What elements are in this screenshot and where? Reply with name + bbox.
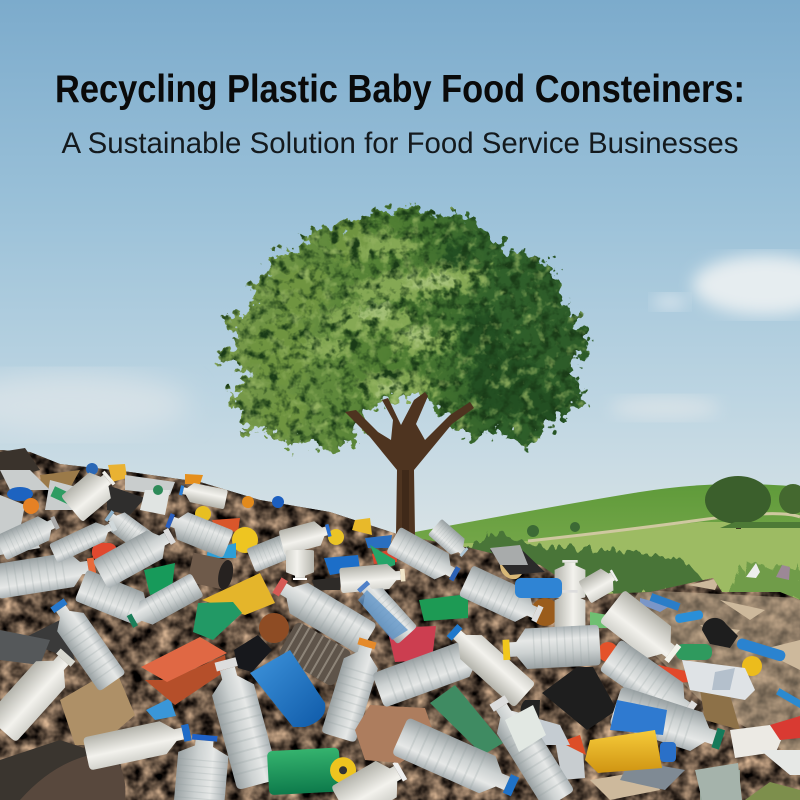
tree (215, 205, 593, 535)
tall grass by the pile (462, 532, 712, 600)
milky bottle (0, 549, 98, 599)
green wedge (193, 602, 242, 640)
blue tinted bottle (358, 590, 408, 640)
blue cap bottle (44, 594, 126, 692)
tube, wedges and boxes (141, 553, 617, 730)
white jug (0, 642, 83, 742)
white bottle with blue cap (83, 716, 193, 770)
front bottles (0, 515, 728, 800)
distant landscape: hills, road, trees (415, 476, 800, 640)
small scattered caps and scraps (0, 448, 800, 800)
copper bottle (355, 705, 436, 763)
yellow wedge (202, 573, 275, 615)
yellow jug (585, 730, 676, 773)
trunk and branches (345, 392, 474, 535)
dark container (234, 635, 272, 672)
people in field (746, 563, 790, 580)
green crate (419, 594, 468, 621)
blue cylinder bottle (515, 578, 562, 598)
orange lidded box (141, 637, 227, 705)
red cup (387, 626, 436, 662)
blue and clear bottle (609, 686, 728, 759)
plastic waste pile (0, 440, 800, 800)
brown tube (187, 553, 236, 591)
short bottle with blue cap (173, 733, 230, 800)
subtitle: A Sustainable Solution for Food Service Businesses (62, 127, 738, 160)
corrugated dark bottle (277, 621, 353, 687)
green ribbed bottle (430, 685, 503, 755)
tall clear bottle (204, 654, 279, 790)
green bottle with yellow cap (267, 747, 357, 795)
foliage (215, 205, 593, 455)
black funnel (542, 667, 617, 730)
small bushes (527, 522, 580, 537)
brown cap (259, 613, 289, 643)
far right tree (779, 484, 800, 514)
clouds (0, 255, 800, 437)
distant tree (705, 476, 771, 529)
top row of bottles and jugs (0, 464, 621, 630)
debris ground (0, 440, 800, 800)
blue cup (250, 650, 325, 727)
